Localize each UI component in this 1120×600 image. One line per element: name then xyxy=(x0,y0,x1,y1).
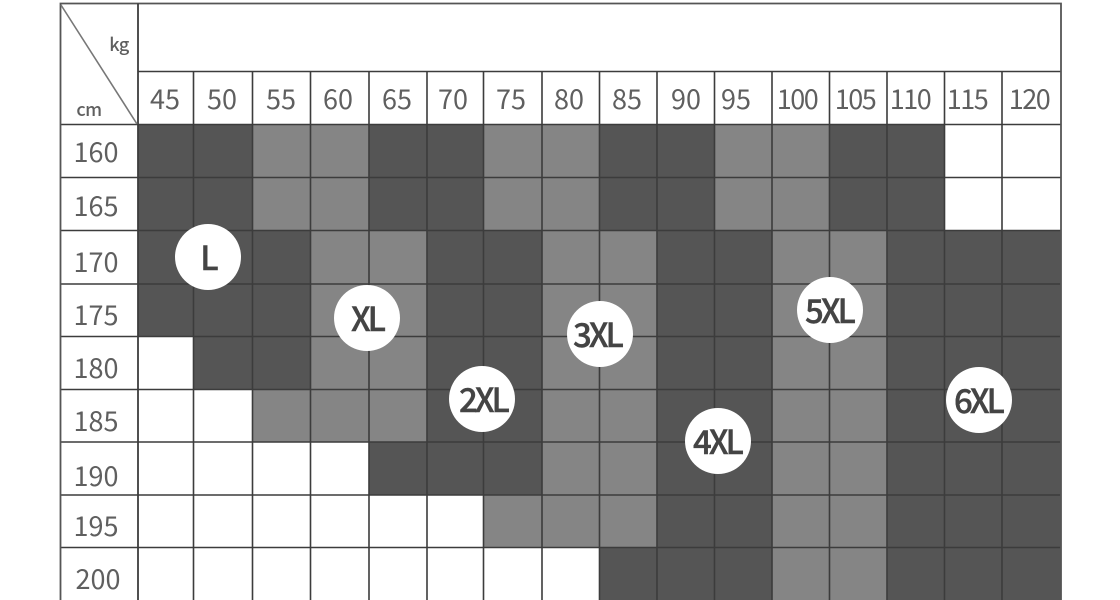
badge: 3XL: 3XL xyxy=(573,309,624,357)
height labels: 175 xyxy=(74,294,118,333)
badge: 4XL: 4XL xyxy=(693,416,744,464)
weight labels: 75 xyxy=(496,78,526,117)
corner header: kg and cm: kg xyxy=(109,31,130,57)
badge: 6XL: 6XL xyxy=(954,375,1005,423)
weight labels: 110 xyxy=(890,78,931,117)
badge: L: L xyxy=(200,232,218,280)
height labels: 170 xyxy=(74,241,118,280)
badge: L xyxy=(175,224,241,290)
height labels xyxy=(74,131,120,597)
height labels: 185 xyxy=(74,400,118,439)
weight labels: 50 xyxy=(207,78,237,117)
weight labels: 105 xyxy=(835,78,876,117)
weight labels: 60 xyxy=(323,78,353,117)
badge: 5XL xyxy=(797,277,863,343)
weight labels: 100 xyxy=(777,78,818,117)
weight labels: 70 xyxy=(438,78,468,117)
badge: 2XL xyxy=(449,366,515,432)
weight labels: 115 xyxy=(947,78,988,117)
colour-coded size cells xyxy=(138,124,1061,600)
height labels: 165 xyxy=(74,185,118,224)
weight labels: 120 xyxy=(1009,78,1050,117)
weight labels: 55 xyxy=(266,78,296,117)
badge: XL xyxy=(334,285,400,351)
badge: 3XL xyxy=(567,301,633,367)
height labels: 195 xyxy=(74,505,118,544)
badge: 2XL: 2XL xyxy=(459,374,510,422)
height labels: 180 xyxy=(74,347,118,386)
badge: 6XL xyxy=(946,367,1012,433)
weight labels: 95 xyxy=(721,78,751,117)
weight labels xyxy=(150,78,1050,117)
weight labels: 85 xyxy=(612,78,642,117)
height labels: 200 xyxy=(76,558,120,597)
height labels: 190 xyxy=(74,455,118,494)
corner header: kg and cm xyxy=(61,5,137,124)
height labels: 160 xyxy=(74,131,118,170)
badge: XL: XL xyxy=(351,293,386,341)
badge: 4XL xyxy=(685,408,751,474)
weight labels: 65 xyxy=(382,78,412,117)
weight labels: 90 xyxy=(671,78,701,117)
weight labels: 45 xyxy=(150,78,180,117)
corner header: kg and cm: cm xyxy=(76,96,102,122)
badge: 5XL: 5XL xyxy=(805,285,856,333)
weight labels: 80 xyxy=(554,78,584,117)
